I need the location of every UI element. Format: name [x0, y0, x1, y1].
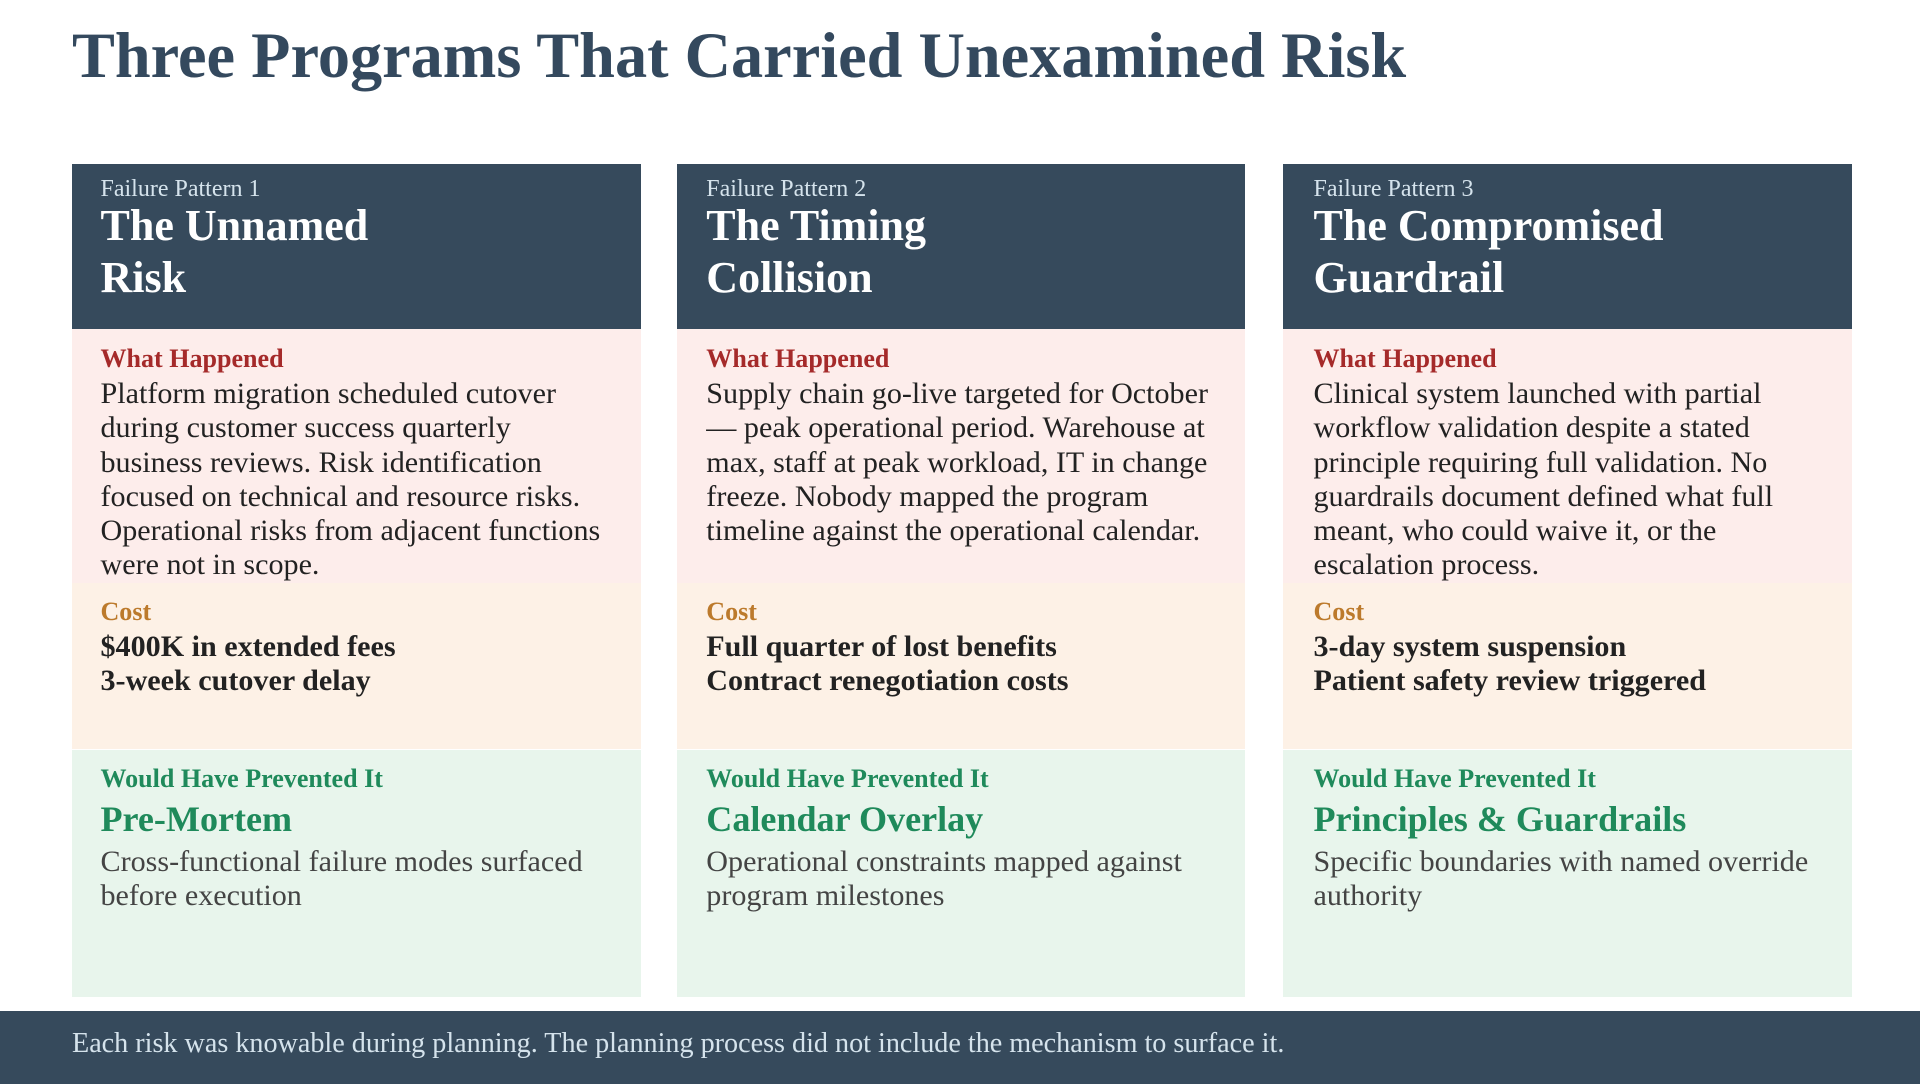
section: what happened 2: What Happened — [706, 344, 889, 372]
section: what happened 3 — [1283, 328, 1852, 583]
section: what happened 1: focused on technical and resource risks. — [100, 479, 580, 513]
section: what happened 3: What Happened — [1314, 344, 1497, 372]
section: prevention 3: Specific boundaries with named override — [1314, 844, 1808, 878]
section: prevention 1: Cross-functional failure modes surfaced — [100, 844, 583, 878]
section: what happened 2 — [677, 328, 1245, 583]
section: what happened 1: were not in scope. — [100, 547, 319, 581]
section: what happened 1: business reviews. Risk identification — [100, 445, 542, 479]
section: prevention 1 — [72, 750, 640, 997]
section: cost 3 — [1283, 583, 1852, 749]
section: cost 1 — [72, 583, 640, 749]
section: prevention 2 — [677, 750, 1245, 997]
section: what happened 2: max, staff at peak workload, IT in change — [706, 445, 1207, 479]
section: what happened 3: workflow validation despite a stated — [1314, 410, 1750, 444]
section: cost 3: 3-day system suspension — [1314, 629, 1626, 663]
section: what happened 1: Operational risks from adjacent functions — [100, 513, 600, 547]
section: cost 3: Patient safety review triggered — [1314, 663, 1706, 697]
section: prevention 3: authority — [1314, 878, 1422, 912]
section: prevention 1: Pre-Mortem — [100, 798, 292, 838]
section: what happened 3: principle requiring full validation. No — [1314, 445, 1767, 479]
section: prevention 3: Would Have Prevented It — [1314, 764, 1596, 793]
section: what happened 3: Clinical system launched with partial — [1314, 376, 1761, 410]
header: pattern 3: Failure Pattern 3 — [1314, 176, 1473, 202]
section: what happened 1: What Happened — [100, 344, 284, 372]
panel: failure pattern 3 — [1283, 164, 1852, 997]
section: cost 2: Full quarter of lost benefits — [706, 629, 1057, 663]
section: what happened 2: — peak operational period. Warehouse at — [706, 410, 1205, 444]
section: prevention 1: before execution — [100, 878, 302, 912]
section: prevention 3 — [1283, 750, 1852, 997]
section: cost 3: Cost — [1314, 597, 1364, 626]
header: pattern 1: Risk — [100, 253, 186, 302]
title: Three Programs That Carried Unexamined Risk — [72, 20, 1406, 91]
section: cost 2 — [677, 583, 1245, 749]
section: what happened 2: Supply chain go-live targeted for October — [706, 376, 1208, 410]
section: what happened 2: freeze. Nobody mapped the program — [706, 479, 1148, 513]
panel: failure pattern 1 — [72, 164, 641, 997]
section: what happened 1: Platform migration scheduled cutover — [100, 376, 556, 410]
header: pattern 1 — [72, 164, 640, 328]
section: prevention 2: program milestones — [706, 878, 944, 912]
header: pattern 2: Failure Pattern 2 — [706, 176, 866, 202]
section: cost 2: Cost — [706, 597, 757, 626]
section: cost 2: Contract renegotiation costs — [706, 663, 1068, 697]
section: prevention 2: Operational constraints mapped against — [706, 844, 1182, 878]
header: pattern 3: The Compromised — [1314, 201, 1663, 250]
section: what happened 2: timeline against the operational calendar. — [706, 513, 1200, 547]
section: prevention 2: Calendar Overlay — [706, 798, 983, 838]
section: cost 1: 3-week cutover delay — [100, 663, 371, 697]
section: prevention 2: Would Have Prevented It — [706, 764, 989, 793]
section: prevention 3: Principles & Guardrails — [1314, 798, 1686, 838]
footer banner — [0, 1011, 1920, 1084]
section: cost 1: $400K in extended fees — [100, 629, 396, 663]
section: what happened 1: during customer success quarterly — [100, 410, 511, 444]
header: pattern 1: Failure Pattern 1 — [100, 176, 260, 202]
section: cost 1: Cost — [100, 597, 151, 626]
section: what happened 1 — [72, 328, 640, 583]
header: pattern 2 — [677, 164, 1245, 328]
section: what happened 3: meant, who could waive it, or the — [1314, 513, 1716, 547]
section: prevention 1: Would Have Prevented It — [100, 764, 383, 793]
header: pattern 2: The Timing — [706, 201, 926, 250]
panel: failure pattern 2 — [677, 164, 1245, 997]
header: pattern 3: Guardrail — [1314, 253, 1504, 302]
header: pattern 1: The Unnamed — [100, 201, 368, 250]
section: what happened 3: escalation process. — [1314, 547, 1539, 581]
footer banner: Each risk was knowable during planning. The planning process did not include the mechanism to surface it. — [72, 1028, 1284, 1059]
header: pattern 3 — [1283, 164, 1852, 328]
section: what happened 3: guardrails document defined what full — [1314, 479, 1773, 513]
header: pattern 2: Collision — [706, 253, 873, 302]
